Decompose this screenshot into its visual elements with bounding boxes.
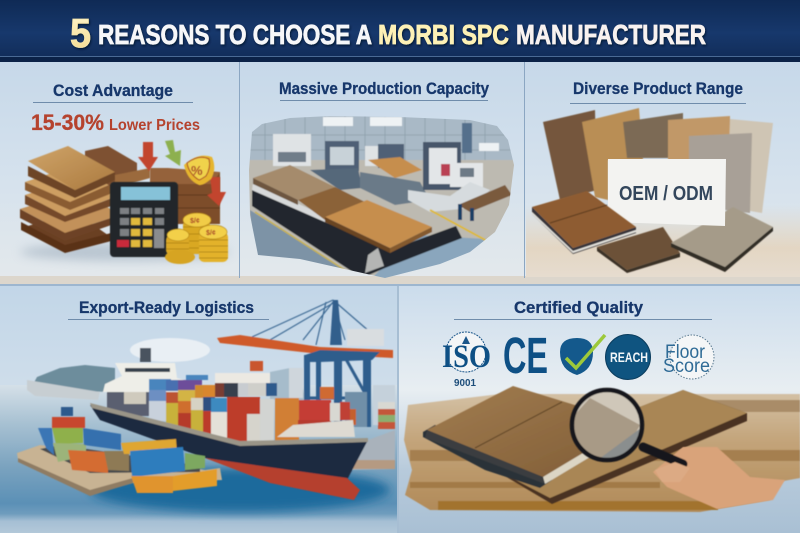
ship hull xyxy=(90,403,368,500)
illustration: flooring board xyxy=(423,386,747,504)
logo: FloorScore: Score xyxy=(663,356,710,377)
illustration: layered sample board xyxy=(532,191,636,254)
bottom panels background xyxy=(0,285,800,533)
illustration: factory production line xyxy=(240,110,520,280)
panel: massive production capacity xyxy=(240,79,520,280)
icon: gold coin stacks: $/¢ xyxy=(190,218,200,225)
ship superstructure xyxy=(103,348,270,392)
heading: export-ready logistics: Export-Ready Logistics xyxy=(79,298,254,317)
illustration: deep water xyxy=(90,468,390,512)
barge with containers xyxy=(17,407,222,496)
logo: check shield xyxy=(560,335,605,375)
icon: gold coin stacks: $/¢ xyxy=(206,230,216,237)
logo: ISO 9001 xyxy=(442,332,491,389)
illustration: wood plank stacks xyxy=(20,146,150,253)
panel: cost advantage xyxy=(20,81,230,264)
container stack on quay xyxy=(378,402,395,429)
logo: CE mark: CE xyxy=(503,327,548,384)
logo: ISO 9001: 9001 xyxy=(454,378,476,389)
divider xyxy=(239,62,240,278)
icon: gold coin stacks xyxy=(165,213,228,264)
title xyxy=(70,10,706,56)
wood table xyxy=(404,394,800,512)
icon: downward arrows and percent badge: % xyxy=(191,163,203,178)
heading: diverse product range: Diverse Product Range xyxy=(573,79,743,98)
stat: 15-30% lower prices xyxy=(31,110,200,135)
divider xyxy=(397,286,399,533)
icon: downward arrows and percent badge xyxy=(138,140,226,206)
title: 5 xyxy=(70,10,91,56)
logo: REACH: REACH xyxy=(610,349,648,365)
stat: 15-30% lower prices: 15-30% xyxy=(31,110,104,135)
title: MANUFACTURER xyxy=(516,19,706,50)
stat: 15-30% lower prices: Lower Prices xyxy=(109,117,200,134)
illustration: back wood block xyxy=(150,168,220,224)
illustration: sea xyxy=(0,385,397,533)
title: MORBI SPC xyxy=(378,19,509,50)
top panels background xyxy=(0,60,800,282)
wood strip between rows xyxy=(0,276,800,285)
panel: certified quality xyxy=(399,286,800,533)
panel: diverse product range xyxy=(526,79,800,277)
shadow under illustration xyxy=(20,243,230,261)
ship containers xyxy=(107,375,356,444)
illustration: flooring plank samples xyxy=(543,108,773,273)
card: OEM / ODM: OEM / ODM xyxy=(619,183,713,205)
header banner xyxy=(0,0,800,62)
heading: cost advantage: Cost Advantage xyxy=(53,81,173,100)
panel: export-ready logistics xyxy=(0,286,397,533)
logo: FloorScore: Floor xyxy=(665,342,706,363)
card: OEM / ODM xyxy=(608,159,726,226)
heading: certified quality: Certified Quality xyxy=(514,298,644,317)
crane xyxy=(217,300,393,431)
floor wash xyxy=(526,205,800,277)
logo: REACH xyxy=(606,334,650,380)
title: REASONS TO CHOOSE A xyxy=(98,19,372,50)
icon: calculator xyxy=(110,182,178,257)
logo: FloorScore xyxy=(663,335,714,379)
heading: massive production capacity: Massive Production Capacity xyxy=(279,79,489,98)
divider xyxy=(524,62,525,278)
icon: magnifying glass and hand xyxy=(570,390,785,509)
logo: ISO 9001: ISO xyxy=(442,339,491,375)
illustration: port, ship and containers xyxy=(17,300,395,500)
